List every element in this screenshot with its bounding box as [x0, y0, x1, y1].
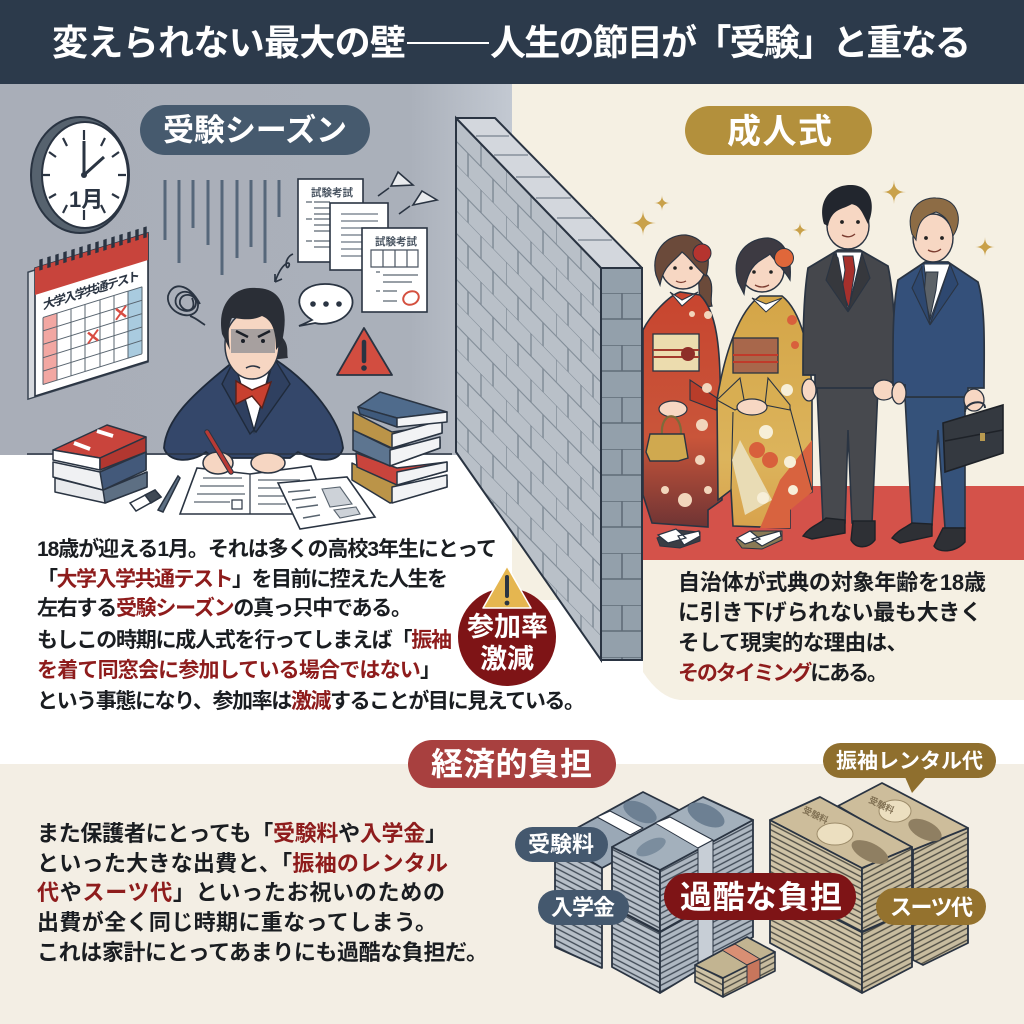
text block: exam season: という事態になり、参加率は激減することが目に見えている。	[37, 689, 585, 713]
callout: participation drop	[458, 566, 556, 686]
label: furisode rental	[823, 743, 996, 793]
figure: man in dark suit	[802, 185, 896, 547]
illustration: student at desk	[164, 288, 343, 460]
icon: exam papers: 試験考試	[311, 186, 353, 199]
desk line	[27, 453, 452, 455]
icon: right book stack	[352, 392, 447, 503]
icon: briefcase	[943, 402, 1003, 472]
text block: exam season: 18歳が迎える1月。それは多くの高校3年生にとって	[37, 537, 497, 561]
icon: eraser and pen	[130, 476, 180, 512]
text block: economic burden: 出費が全く同じ時期に重なってしまう。	[37, 910, 437, 935]
title: 人生の節目が「受験」と重なる	[490, 22, 971, 63]
badge: economic burden	[408, 740, 616, 788]
figure: woman in red furisode	[643, 235, 722, 548]
text block: exam season: を着て同窓会に参加している場合ではない」	[37, 659, 441, 682]
text block: timing reason: そのタイミングにある。	[678, 661, 888, 685]
icon: wall clock January: 1月	[69, 187, 103, 212]
blue stack front	[612, 797, 753, 993]
label: suit cost: スーツ代	[890, 895, 973, 920]
text block: exam season: もしこの時期に成人式を行ってしまえば「振袖	[37, 628, 452, 652]
tan stack front: 受験料	[801, 804, 830, 826]
text block: economic burden: また保護者にとっても「受験料や入学金」	[37, 821, 447, 846]
icon: loose worksheet	[278, 477, 375, 529]
icon: exam papers	[298, 179, 427, 312]
small tan bundle	[695, 937, 775, 997]
sparkles	[630, 180, 995, 257]
badge: exam season: 受験シーズン	[163, 113, 347, 148]
falling gloom lines	[165, 180, 279, 275]
label: admission fee	[538, 890, 629, 925]
text block: economic burden	[37, 821, 488, 965]
icon: stress scribble	[168, 286, 205, 325]
illustration: coming-of-age group	[630, 180, 1024, 560]
illustration: brick wall	[456, 118, 642, 660]
text block: timing reason: そして現実的な理由は、	[678, 631, 908, 655]
label: suit cost	[876, 888, 986, 925]
student hands and pen	[203, 432, 285, 474]
icon: calendar	[28, 226, 148, 399]
blue stack back	[555, 792, 695, 968]
badge: coming-of-age ceremony	[685, 106, 872, 155]
icon: left book stack	[53, 425, 147, 503]
text block: exam season: 左右する受験シーズンの真っ只中である。	[37, 596, 412, 620]
text block: economic burden: これは家計にとってあまりにも過酷な負担だ。	[37, 940, 488, 965]
figure: man in navy suit	[892, 198, 1003, 551]
icon: wall clock January	[31, 117, 129, 233]
text block: timing reason: に引き下げられない最も大きく	[678, 600, 982, 625]
icon: curl arrow	[275, 254, 293, 282]
text block: exam season	[37, 537, 585, 713]
callout: harsh burden: 過酷な負担	[680, 879, 842, 915]
callout: participation drop: 激減	[480, 644, 534, 674]
callout: participation drop: 参加率	[467, 612, 548, 642]
badge: coming-of-age ceremony: 成人式	[727, 113, 832, 151]
title: 変えられない最大の壁	[52, 22, 406, 63]
tan stack back	[838, 783, 968, 965]
icon: set squares	[378, 172, 437, 214]
badge: exam season	[140, 105, 370, 155]
icon: speech bubble	[299, 284, 353, 326]
icon: open workbook	[180, 466, 330, 514]
figure: woman in yellow furisode	[717, 238, 812, 549]
text block: timing reason: 自治体が式典の対象年齢を18歳	[678, 570, 986, 595]
badge: economic burden: 経済的負担	[431, 746, 592, 782]
text block: economic burden: といった大きな出費と、「振袖のレンタル	[37, 851, 448, 876]
label: exam fee	[515, 827, 608, 862]
text block: timing reason	[678, 570, 986, 685]
icon: warning triangle	[337, 328, 392, 375]
label: furisode rental: 振袖レンタル代	[836, 750, 983, 773]
tan stack back: 受験料	[867, 794, 896, 816]
text block: economic burden: 代やスーツ代」といったお祝いのための	[37, 880, 445, 905]
label: admission fee: 入学金	[551, 895, 615, 920]
icon: calendar: 大学入学共通テスト	[43, 268, 140, 312]
panel: exam season illustration	[27, 105, 452, 529]
red carpet	[643, 486, 1024, 560]
tan stack front	[770, 797, 912, 993]
callout: harsh burden	[664, 873, 856, 920]
icon: exam papers: 試験考試	[375, 235, 417, 248]
illustration: stacks of money	[555, 783, 968, 997]
label: exam fee: 受験料	[528, 832, 594, 857]
title	[0, 0, 1024, 84]
text block: exam season: 「大学入学共通テスト」を目前に控えた人生を	[37, 568, 448, 591]
